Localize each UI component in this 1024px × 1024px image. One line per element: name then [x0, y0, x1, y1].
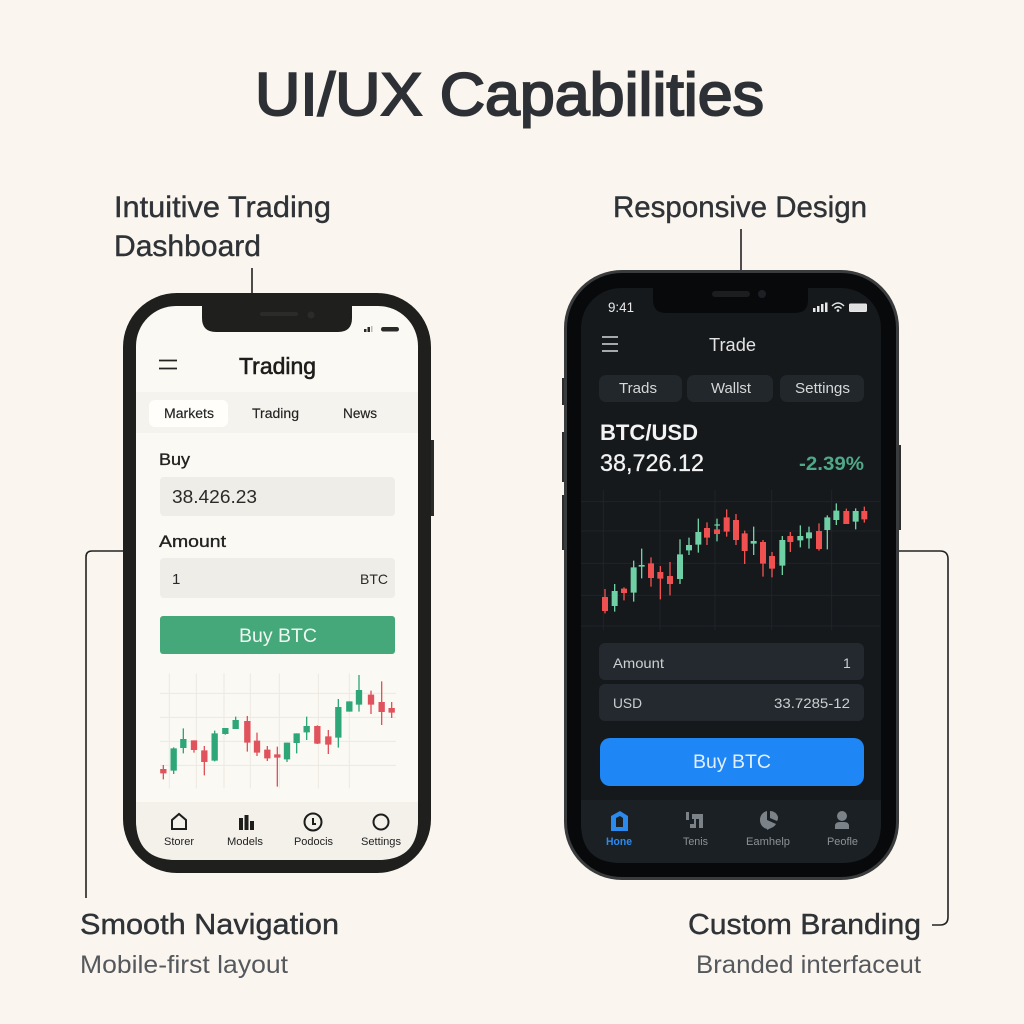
- icon: tenis: [686, 812, 703, 828]
- usd row: 33.7285-12: [774, 695, 850, 711]
- tab pills: Settings: [795, 380, 850, 397]
- caption: Smooth Navigation: Mobile-first layout: [80, 951, 288, 979]
- icon: eamhelp: [760, 811, 778, 830]
- left phone: Trading: [123, 293, 434, 873]
- notch: [202, 306, 352, 332]
- nav labels: Eamhelp: [746, 836, 790, 848]
- caption: Custom Branding: Custom Branding: [688, 909, 921, 941]
- tab pills: Trads: [619, 380, 657, 397]
- tab bar: [136, 392, 418, 433]
- caption: Custom Branding: Branded interfaceut: [696, 951, 921, 979]
- icon: podocis clock: [304, 814, 322, 830]
- connector: custom branding to right phone: [899, 551, 948, 925]
- icon: store: [172, 814, 186, 829]
- nav labels: Hone: [606, 836, 632, 848]
- heading: Intuitive Trading Dashboard: Intuitive Trading: [114, 191, 331, 224]
- tab bar: Trading: [252, 406, 299, 421]
- buy field: [159, 450, 395, 516]
- amount row: Amount: [613, 655, 664, 671]
- nav labels: Podocis: [294, 836, 333, 848]
- price: 38,726.12: [600, 450, 704, 477]
- tab bar: News: [343, 406, 377, 421]
- heading: Responsive Design: Responsive Design: [613, 191, 867, 224]
- tab pills: Wallst: [711, 380, 752, 397]
- amount field: [159, 532, 395, 598]
- icon: settings: [374, 814, 388, 830]
- candlestick chart: light: [160, 673, 396, 788]
- screen title: Trading: [239, 353, 316, 379]
- hamburger menu icon: [159, 360, 177, 368]
- pair label: BTC/USD: [600, 420, 698, 445]
- status icons: [364, 326, 399, 332]
- phone frame: [123, 293, 434, 873]
- title: UI/UX Capabilities: [255, 61, 764, 128]
- hamburger menu icon: [602, 337, 618, 351]
- caption: Custom Branding: [688, 909, 921, 979]
- heading: Intuitive Trading Dashboard: [114, 191, 331, 263]
- nav labels: Settings: [361, 836, 401, 848]
- buy button: Buy BTC: [239, 626, 317, 647]
- heading: Intuitive Trading Dashboard: Dashboard: [114, 230, 261, 263]
- buy button: Buy BTC: [693, 752, 771, 773]
- buy button: [160, 616, 395, 654]
- caption: Smooth Navigation: Smooth Navigation: [80, 909, 339, 941]
- buy field: Buy: [159, 450, 191, 469]
- connector: smooth navigation to left phone: [86, 551, 124, 898]
- right phone: Trade: [562, 270, 901, 880]
- amount row: 1: [843, 655, 851, 671]
- amount row: [599, 643, 864, 680]
- buy field: 38.426.23: [172, 487, 257, 507]
- connector: responsive design to right phone: [740, 229, 742, 271]
- nav labels: [606, 836, 858, 848]
- nav labels: Peofle: [827, 836, 858, 848]
- tab bar: Markets: [164, 406, 214, 421]
- amount field: BTC: [360, 571, 388, 587]
- bottom navigation: [136, 802, 418, 860]
- phone screen: [136, 306, 418, 860]
- bottom navigation: [581, 800, 881, 863]
- icon: home: [611, 811, 628, 831]
- usd row: USD: [613, 695, 642, 711]
- caption: Smooth Navigation: [80, 909, 339, 979]
- nav labels: Models: [227, 836, 263, 848]
- icon: peofle: [835, 811, 849, 829]
- candlestick chart: dark: [581, 490, 880, 630]
- screen title: Trade: [709, 335, 756, 355]
- tab pills: [599, 375, 864, 402]
- usd row: [599, 684, 864, 721]
- amount field: 1: [172, 571, 180, 588]
- percent change: -2.39%: [799, 454, 864, 475]
- buy button: [600, 738, 864, 786]
- phone frame: [562, 270, 901, 880]
- nav labels: Storer: [164, 836, 194, 848]
- connector: dashboard to left phone: [251, 268, 253, 294]
- status time: 9:41: [608, 300, 634, 315]
- nav labels: Tenis: [683, 836, 708, 848]
- notch: [653, 288, 808, 313]
- amount field: Amount: [159, 532, 226, 551]
- icon: models: [239, 815, 254, 830]
- status icons: [813, 302, 866, 312]
- nav labels: [164, 836, 401, 848]
- phone screen: [581, 288, 881, 863]
